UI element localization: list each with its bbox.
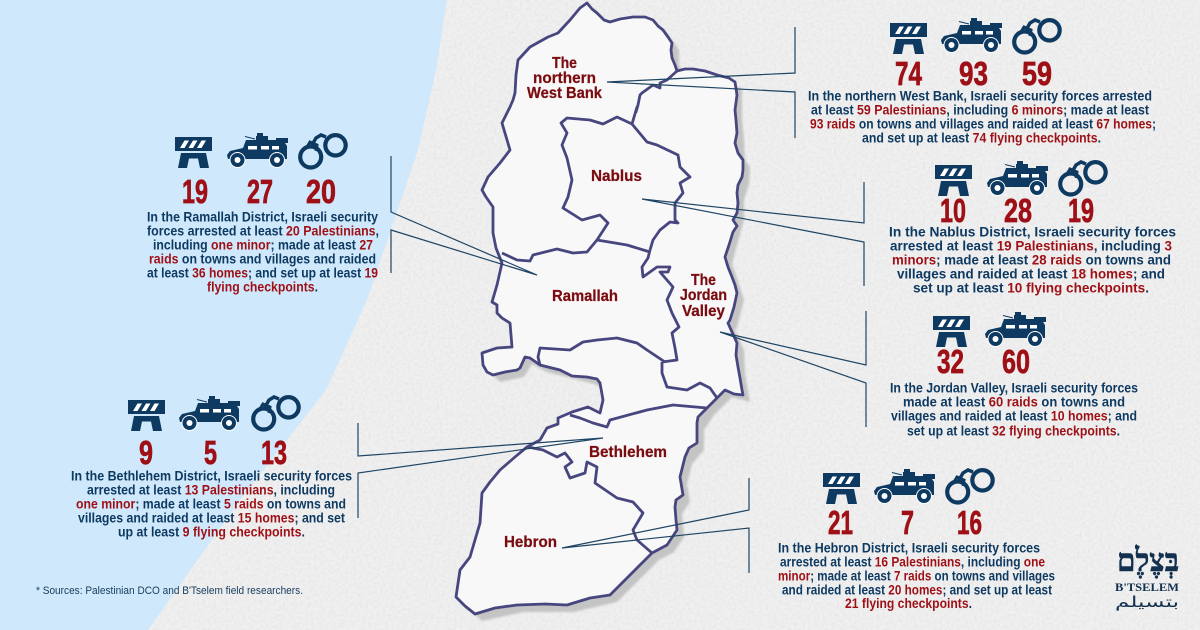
- numbers: 13: [261, 434, 287, 471]
- district boundary: Nablus east: [597, 124, 690, 252]
- district boundary: Jordan Valley west: [642, 250, 679, 362]
- icon: barricade: [128, 400, 165, 431]
- numbers: 10: [940, 192, 966, 229]
- numbers: 32: [937, 343, 964, 380]
- district boundary: northern West Bank and Jordan Valley: [632, 71, 677, 124]
- numbers: 20: [306, 173, 336, 210]
- panel: Jordan Valley: [890, 312, 1138, 438]
- text block: up at least 9 flying checkpoints.: [118, 524, 305, 540]
- text block: villages and raided at least 10 homes; and: [891, 408, 1137, 424]
- numbers: 9: [139, 434, 153, 471]
- text block: made at least 60 raids on towns and: [903, 394, 1125, 410]
- numbers: 59: [1022, 55, 1052, 92]
- text block: arrested at least 16 Palestinians, including one: [780, 554, 1045, 570]
- district boundary: Jordan Valley south: [662, 362, 717, 398]
- text block: villages and raided at least 18 homes; and: [897, 266, 1165, 282]
- numbers: 60: [1002, 343, 1030, 380]
- text block: In the Hebron District, Israeli security forces: [778, 540, 1040, 556]
- leader: Ramallah: [391, 156, 537, 275]
- text block: set up at least 32 flying checkpoints.: [907, 424, 1120, 438]
- icon: barricade: [890, 23, 927, 54]
- icon: barricade: [933, 316, 970, 347]
- text block: villages and raided at least 15 homes; and set: [78, 510, 345, 526]
- text block: and raided at least 20 homes; and set up at least: [782, 582, 1052, 598]
- icon: armoured vehicle: [874, 469, 935, 504]
- icon: barricade: [175, 137, 212, 168]
- map label: Jordan Valley: The: [691, 272, 716, 289]
- map outline: [456, 3, 743, 614]
- numbers: [182, 173, 336, 210]
- map label: northern West Bank: northern: [533, 70, 596, 87]
- icon: handcuffs: [253, 397, 299, 430]
- icon: barricade: [935, 165, 972, 196]
- numbers: 28: [1004, 192, 1032, 229]
- map of the West Bank districts: [456, 3, 743, 614]
- text block: including one minor; made at least 27: [153, 238, 373, 252]
- numbers: 21: [828, 504, 853, 541]
- logo: B'Tselem: بتسيلم: [1115, 593, 1179, 611]
- map label: Jordan Valley: Jordan: [680, 287, 727, 304]
- numbers: 16: [957, 504, 982, 541]
- text block: at least 59 Palestinians, including 6 minors; made at least: [811, 102, 1149, 118]
- panel: Nablus: [889, 161, 1176, 296]
- text block: minors; made at least 28 raids on towns and: [892, 252, 1171, 268]
- numbers: [937, 343, 1030, 380]
- icon: armoured vehicle: [987, 161, 1048, 196]
- map label: Jordan Valley: Valley: [682, 303, 725, 320]
- text block: [147, 210, 379, 294]
- leader: Jordan Valley: [720, 311, 866, 427]
- text block: [778, 540, 1055, 611]
- map label: Nablus: Nablus: [591, 168, 642, 185]
- icon: handcuffs: [1014, 20, 1060, 52]
- numbers: 19: [1068, 192, 1094, 229]
- text block: In the Jordan Valley, Israeli security forces: [890, 380, 1138, 396]
- text block: 21 flying checkpoints.: [845, 596, 972, 611]
- map label: northern West Bank: [527, 55, 602, 102]
- text block: at least 36 homes; and set up at least 19: [147, 266, 378, 280]
- text block: raids on towns and villages and raided: [149, 252, 376, 266]
- numbers: 93: [959, 55, 988, 92]
- map label: Bethlehem: Bethlehem: [589, 444, 667, 461]
- logo: B'Tselem: [1115, 542, 1179, 611]
- icon: handcuffs: [300, 135, 346, 168]
- text block: In the northern West Bank, Israeli security forces arrested: [808, 88, 1152, 104]
- numbers: [895, 55, 1052, 92]
- panel: Bethlehem: [71, 396, 352, 540]
- logo: B'Tselem: B'TSELEM: [1115, 580, 1179, 594]
- text block: set up at least 10 flying checkpoints.: [913, 280, 1149, 296]
- text block: [889, 224, 1176, 296]
- icon: armoured vehicle: [227, 133, 288, 168]
- text block: forces arrested at least 20 Palestinians,: [147, 224, 379, 238]
- text block: In the Ramallah District, Israeli security: [147, 210, 378, 224]
- text block: 93 raids on towns and villages and raided at least 67 homes;: [810, 116, 1156, 132]
- icon: armoured vehicle: [985, 312, 1046, 347]
- leader: northern West Bank: [607, 27, 795, 138]
- icon: barricade: [823, 473, 860, 504]
- numbers: 74: [895, 55, 922, 92]
- map label: Jordan Valley: [680, 272, 727, 320]
- icon: handcuffs: [1060, 162, 1106, 194]
- district boundary: Hebron: [528, 447, 652, 553]
- numbers: 19: [182, 173, 208, 210]
- text block: flying checkpoints.: [207, 280, 318, 294]
- numbers: [828, 504, 982, 541]
- text block: In the Nablus District, Israeli security forces: [889, 224, 1176, 240]
- map label: northern West Bank: The: [552, 55, 577, 72]
- district boundary: Ramallah south: [538, 338, 665, 365]
- numbers: [139, 434, 287, 471]
- leader: Bethlehem: [358, 423, 603, 518]
- icon: handcuffs: [947, 470, 993, 502]
- map shadow: [463, 10, 750, 621]
- text block: arrested at least 13 Palestinians, including: [87, 482, 335, 498]
- sea area: [0, 0, 447, 630]
- map label: Hebron: Hebron: [504, 534, 557, 551]
- panel: Hebron: [778, 469, 1055, 611]
- logo: B'Tselem: בְּצֶלֶם: [1117, 542, 1179, 578]
- text block: [808, 88, 1156, 146]
- numbers: 7: [901, 504, 914, 541]
- map label: Ramallah: Ramallah: [552, 288, 618, 305]
- panel: Ramallah: [147, 133, 379, 294]
- panel: northern West Bank: [808, 18, 1156, 146]
- leader: Nablus: [642, 182, 864, 286]
- text block: one minor; made at least 5 raids on towns and: [76, 496, 346, 512]
- source note: * Sources: Palestinian DCO and B'Tselem field researchers.: [36, 585, 303, 597]
- leader: Hebron: [562, 478, 749, 573]
- numbers: 27: [247, 173, 273, 210]
- text block: In the Bethlehem District, Israeli security forces: [71, 468, 352, 484]
- district boundary: Bethlehem north: [570, 405, 707, 427]
- numbers: 5: [204, 434, 217, 471]
- text block: minor; made at least 7 raids on towns and villages: [778, 568, 1055, 584]
- text block: arrested at least 19 Palestinians, including 3: [890, 238, 1172, 254]
- map label: northern West Bank: West Bank: [527, 85, 602, 102]
- text block: [890, 380, 1138, 438]
- icon: armoured vehicle: [941, 18, 1002, 53]
- icon: armoured vehicle: [179, 396, 240, 431]
- numbers: [940, 192, 1094, 229]
- district boundary: Nablus: [502, 117, 632, 261]
- text block: [71, 468, 352, 540]
- text block: and set up at least 74 flying checkpoints.: [862, 130, 1101, 146]
